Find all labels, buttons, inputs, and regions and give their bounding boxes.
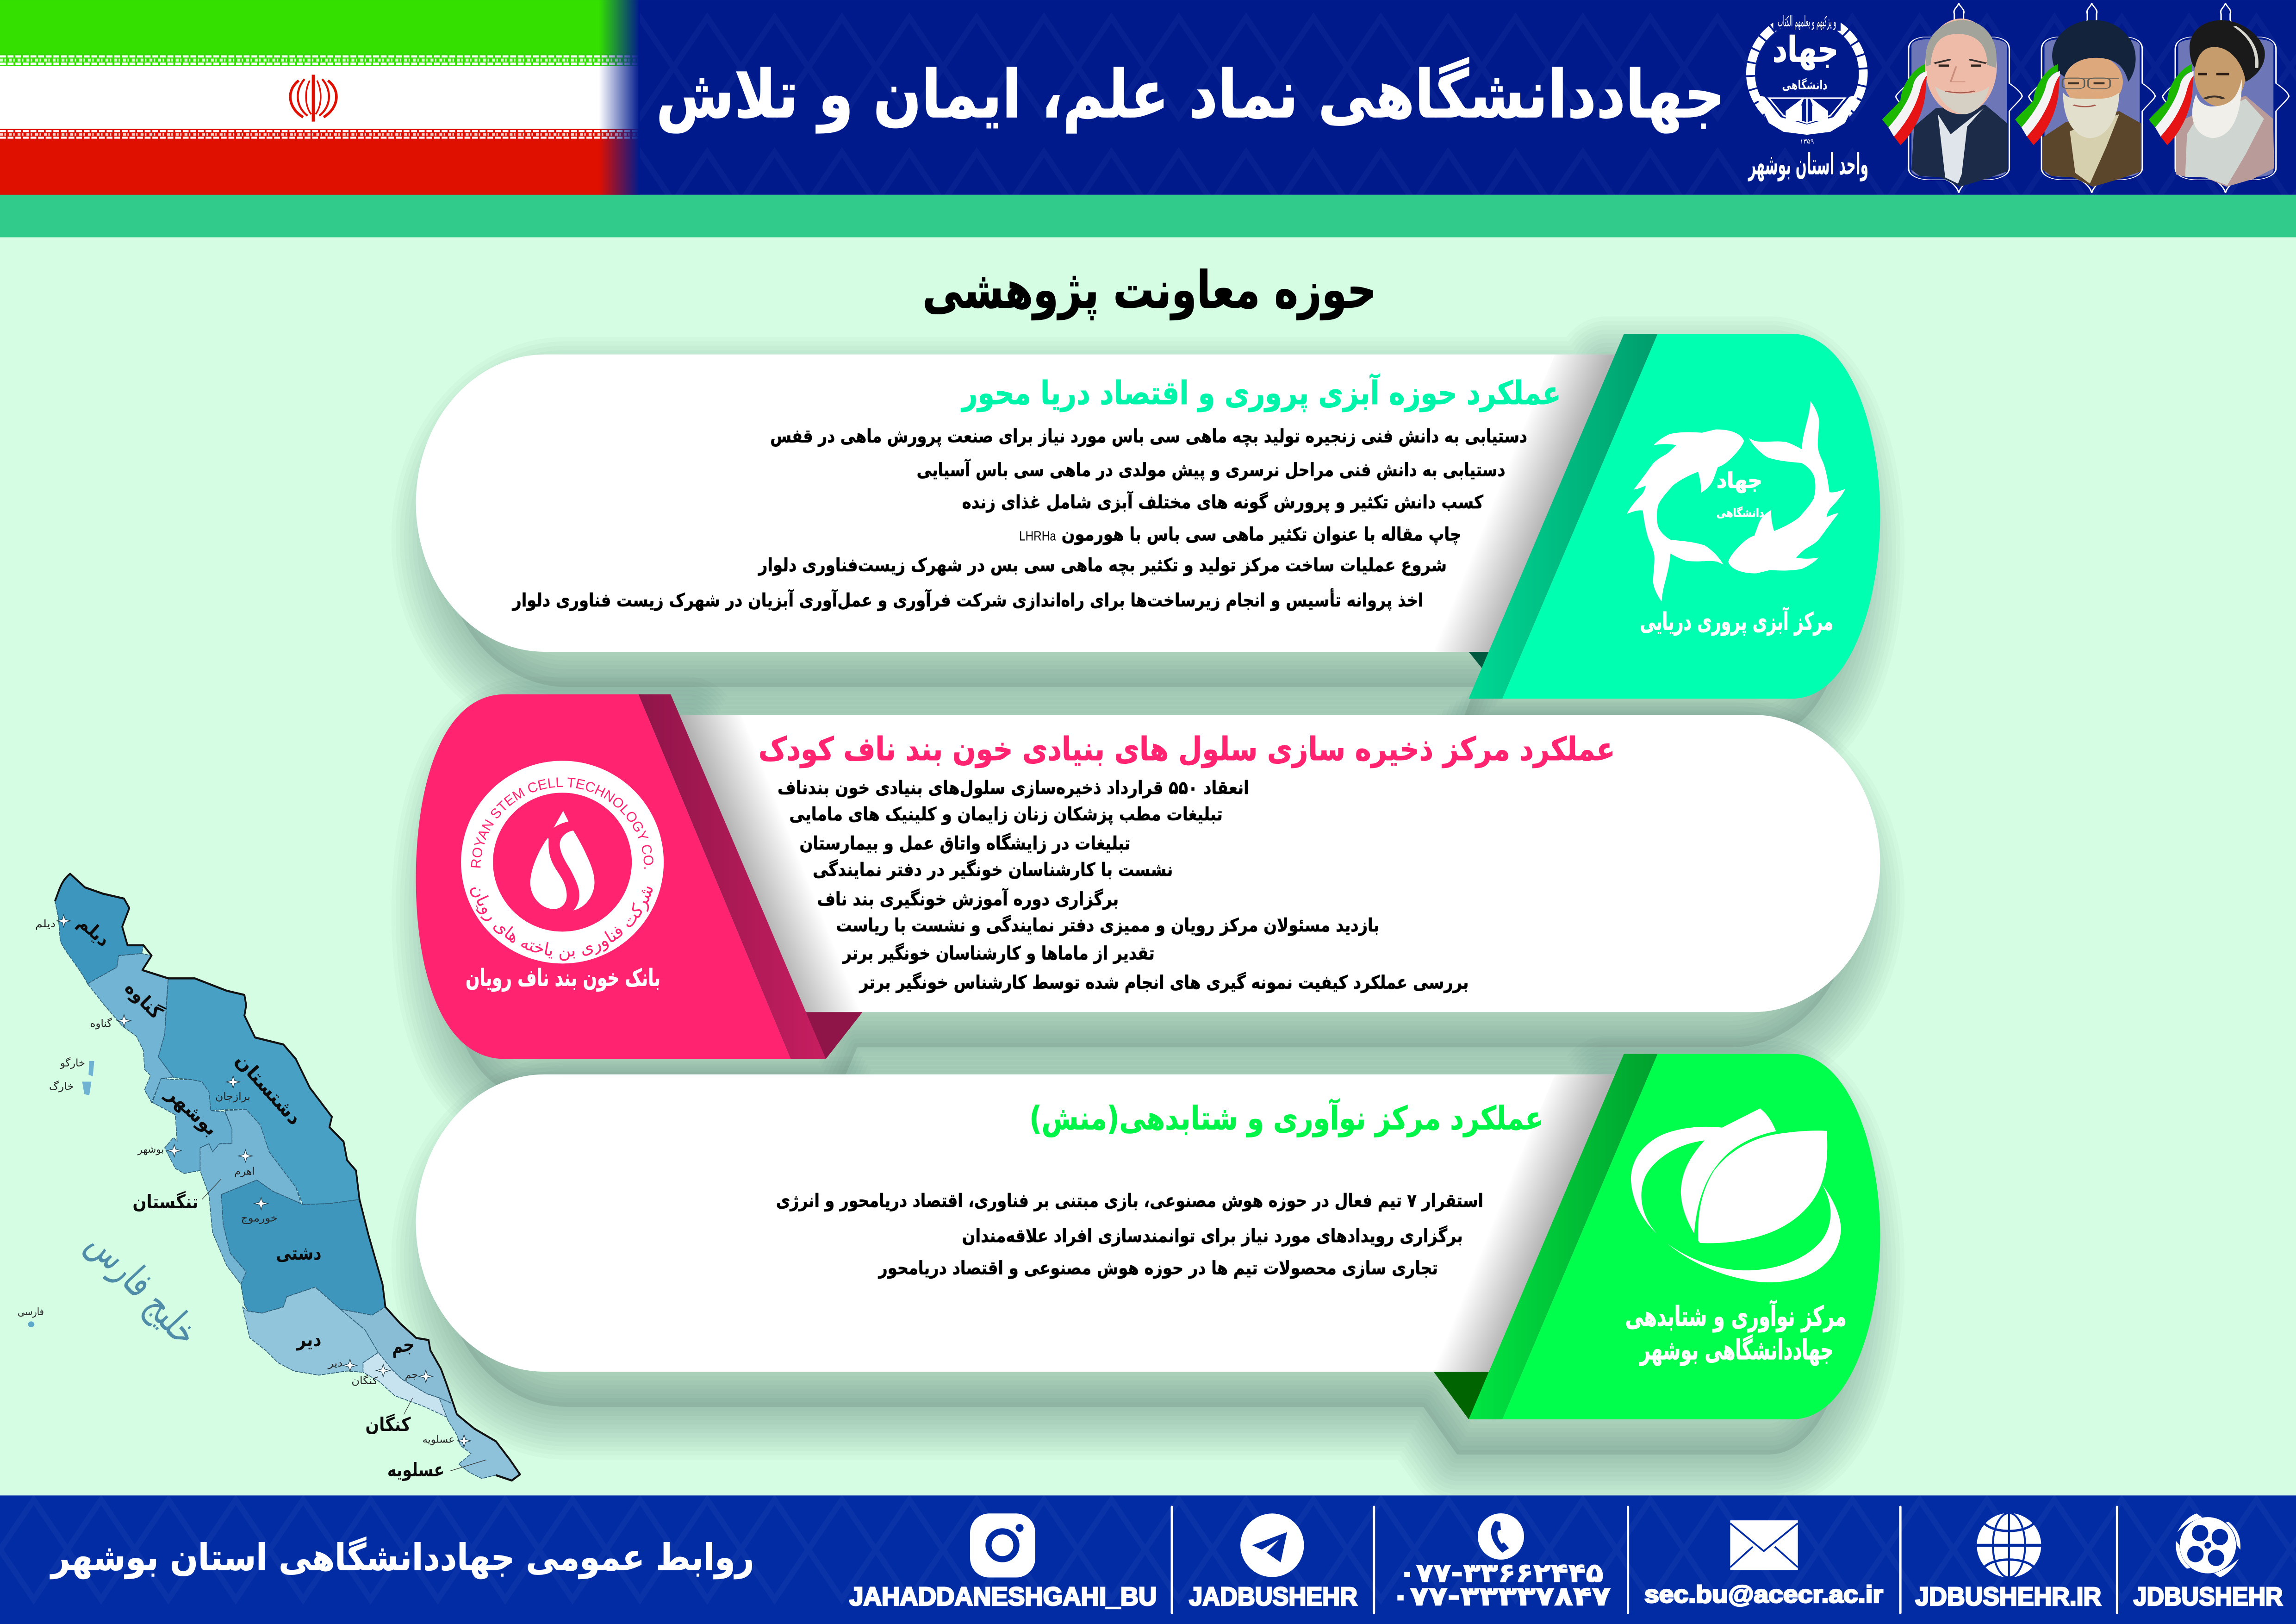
city labels: خارگ [49, 1081, 74, 1093]
city labels: گناوه [90, 1018, 112, 1030]
district names [74, 912, 444, 1481]
ribbon fold [1433, 1372, 1491, 1419]
city labels: جم [405, 1369, 418, 1381]
text block: achievements: نشست با کارشناسان خونگیر در دفتر نمایندگی [813, 859, 1173, 881]
icon: royan logo: ROYAN STEM CELL TECHNOLOGY CO. [468, 775, 656, 870]
ribbon fold [1468, 652, 1491, 675]
icon: film reel [2176, 1513, 2240, 1578]
text block: achievements: انعقاد ۵۵۰ قرارداد ذخیره‌سازی سلول‌های بنیادی خون بندناف [778, 777, 1249, 799]
text block: achievements [776, 1190, 1483, 1279]
text block: achievements [778, 777, 1468, 993]
map: bushehr province [18, 874, 520, 1481]
text block: achievements: برگزاری رویدادهای مورد نیاز برای توانمندسازی افراد علاقه‌مندان [962, 1225, 1463, 1247]
icon: instagram [970, 1513, 1035, 1578]
panel body [416, 1074, 1628, 1372]
panel heading: عملکرد مرکز نوآوری و شتابدهی(منش) [1029, 1098, 1543, 1137]
icon: royan logo: شرکت فناوری بن یاخته های رویان [467, 882, 658, 961]
label: video channel: JDBUSHEHR [2134, 1582, 2283, 1611]
text: واحد استان بوشهر [1748, 147, 1868, 182]
panel: innovation centre [416, 1054, 1880, 1419]
icon: royan logo [461, 761, 664, 963]
text block: achievements: اخذ پروانه تأسیس و انجام زیرساخت‌ها برای راه‌اندازی شرکت فرآوری و عمل‌آوری آبزیان در شهرک زیست فناوری دلوار [512, 588, 1423, 611]
text block: achievements: تبلیغات مطب پزشکان زنان زایمان و کلینیک های مامایی [789, 804, 1223, 825]
icon: two fish: دانشگاهی [1717, 506, 1764, 520]
city stars [57, 915, 471, 1447]
panel heading: عملکرد حوزه آبزی پروری و اقتصاد دریا محور [961, 373, 1561, 412]
icon: two fish: جهاد [1717, 468, 1762, 493]
footer dividers [1171, 1506, 2118, 1614]
icon: telegram [1240, 1513, 1304, 1577]
text block: achievements: تبلیغات در زایشگاه واتاق عمل و بیمارستان [799, 833, 1131, 854]
city labels: برازجان [215, 1091, 250, 1103]
city labels: خارگو [60, 1057, 85, 1069]
district names: گناوه [120, 977, 167, 1024]
gulf name: خلیج فارس [78, 1221, 208, 1355]
text block: achievements: کسب دانش تکثیر و پرورش گونه های مختلف آبزی شامل غذای زنده [962, 491, 1483, 513]
district names: دیر [296, 1329, 321, 1351]
city labels: دیلم [35, 918, 56, 930]
city labels: کنگان [351, 1375, 378, 1387]
icon: leaf logo [1631, 1108, 1841, 1282]
phone numbers: ۰۷۷-۳۳۶۶۲۴۴۵ [1399, 1558, 1603, 1588]
panel: aquaculture [416, 334, 1880, 699]
portrait 2 [2015, 3, 2155, 193]
ribbon fold [803, 1012, 863, 1059]
jahad logo: جهاد [1773, 29, 1838, 70]
ribbon label: بانک خون بند ناف رویان [466, 964, 660, 992]
panel shadows [442, 369, 1854, 1455]
label: instagram handle: JAHADDANESHGAHI_BU [849, 1582, 1157, 1611]
city labels [18, 918, 454, 1445]
city labels: دیر [328, 1357, 342, 1369]
text block: achievements: شروع عملیات ساخت مرکز تولید و تکثیر بچه ماهی سی بس در شهرک زیست‌فناوری دلوار [758, 555, 1447, 576]
jahad logo: دانشگاهی [1782, 78, 1828, 93]
section heading: حوزه معاونت پژوهشی [922, 260, 1376, 320]
text block: achievements: تقدیر از ماماها و کارشناسان خونگیر برتر [842, 943, 1155, 964]
text block: achievements: بازدید مسئولان مرکز رویان و ممیزی دفتر نمایندگی و نشست با ریاست [836, 915, 1379, 936]
ribbon [1468, 1054, 1880, 1419]
icon: phone [1478, 1513, 1524, 1560]
phone numbers: ۰۷۷-۳۳۳۳۷۸۴۷ [1391, 1581, 1611, 1612]
jahad logo: و یزکیهم و یعلمهم الکتاب [1778, 13, 1836, 30]
text block: achievements: دستیابی به دانش فنی زنجیره تولید بچه ماهی سی باس مورد نیاز برای صنعت پرورش ماهی در قفس [770, 426, 1527, 447]
footer band [0, 1495, 2296, 1624]
text block: achievements: چاپ مقاله با عنوان تکثیر ماهی سی باس با هورمون LHRHa [1019, 524, 1462, 545]
jahad logo [1750, 9, 1863, 145]
portrait 1 [1882, 3, 2022, 193]
icon: two fish [1627, 401, 1845, 601]
district names: دیلم [74, 912, 114, 951]
city labels: بوشهر [137, 1143, 164, 1156]
ribbon [416, 694, 826, 1059]
district names: جم [389, 1333, 416, 1358]
footer title: روابط عمومی جهاددانشگاهی استان بوشهر [50, 1537, 754, 1580]
icon: globe [1977, 1513, 2041, 1578]
header band [0, 0, 2296, 195]
emblem [290, 75, 336, 122]
district names: عسلویه [387, 1459, 444, 1481]
panel body [416, 355, 1628, 652]
label: telegram handle: JADBUSHEHR [1189, 1582, 1357, 1611]
district names: دشتی [276, 1242, 321, 1264]
text block: achievements: استقرار ۷ تیم فعال در حوزه هوش مصنوعی، بازی مبتنی بر فناوری، اقتصاد دریامحور و انرژی [776, 1190, 1483, 1212]
ribbon label [1625, 1299, 1847, 1366]
city labels: فارسی [18, 1306, 44, 1318]
portrait 3 [2149, 3, 2289, 193]
city labels: خورموج [241, 1212, 278, 1224]
district names: دشتستان [231, 1049, 306, 1130]
label: website: JDBUSHEHR.IR [1915, 1582, 2101, 1611]
ribbon label: جهاددانشگاهی بوشهر [1639, 1334, 1833, 1366]
text block: achievements: برگزاری دوره آموزش خونگیری بند ناف [817, 887, 1119, 910]
text block: achievements: بررسی عملکرد کیفیت نمونه گیری های انجام شده توسط کارشناس خونگیر برتر [859, 972, 1468, 993]
district names: بوشهر [161, 1082, 223, 1140]
icon: mail [1730, 1520, 1798, 1570]
green strip under header [0, 195, 2296, 237]
city labels: عسلویه [423, 1433, 454, 1445]
main title: جهاددانشگاهی نماد علم، ایمان و تلاش [656, 56, 1725, 133]
panel heading: عملکرد مرکز ذخیره سازی سلول های بنیادی خون بند ناف کودک [759, 731, 1615, 768]
text block: achievements: تجاری سازی محصولات تیم ها در حوزه هوش مصنوعی و اقتصاد دریامحور [878, 1258, 1438, 1279]
province regions [28, 874, 520, 1480]
ribbon label: مرکز آبزی پروری دریایی [1640, 606, 1833, 636]
panel body [644, 715, 1880, 1012]
panel: umbilical cord blood [416, 694, 1880, 1059]
city labels: اهرم [234, 1165, 255, 1177]
district names: کنگان [365, 1413, 411, 1436]
label: email: sec.bu@acecr.ac.ir [1644, 1581, 1883, 1608]
district names: تنگستان [132, 1191, 199, 1213]
phone numbers [1391, 1558, 1611, 1612]
portraits row [1882, 3, 2289, 193]
jahad logo: ۱۳۵۹ [1800, 138, 1814, 145]
iranian flag [0, 0, 640, 195]
ribbon [1468, 334, 1880, 699]
ribbon label: مرکز نوآوری و شتابدهی [1625, 1299, 1847, 1332]
text block: achievements [512, 426, 1527, 611]
text block: achievements: دستیابی به دانش فنی مراحل نرسری و پیش مولدی در ماهی سی باس آسیایی [917, 458, 1505, 481]
